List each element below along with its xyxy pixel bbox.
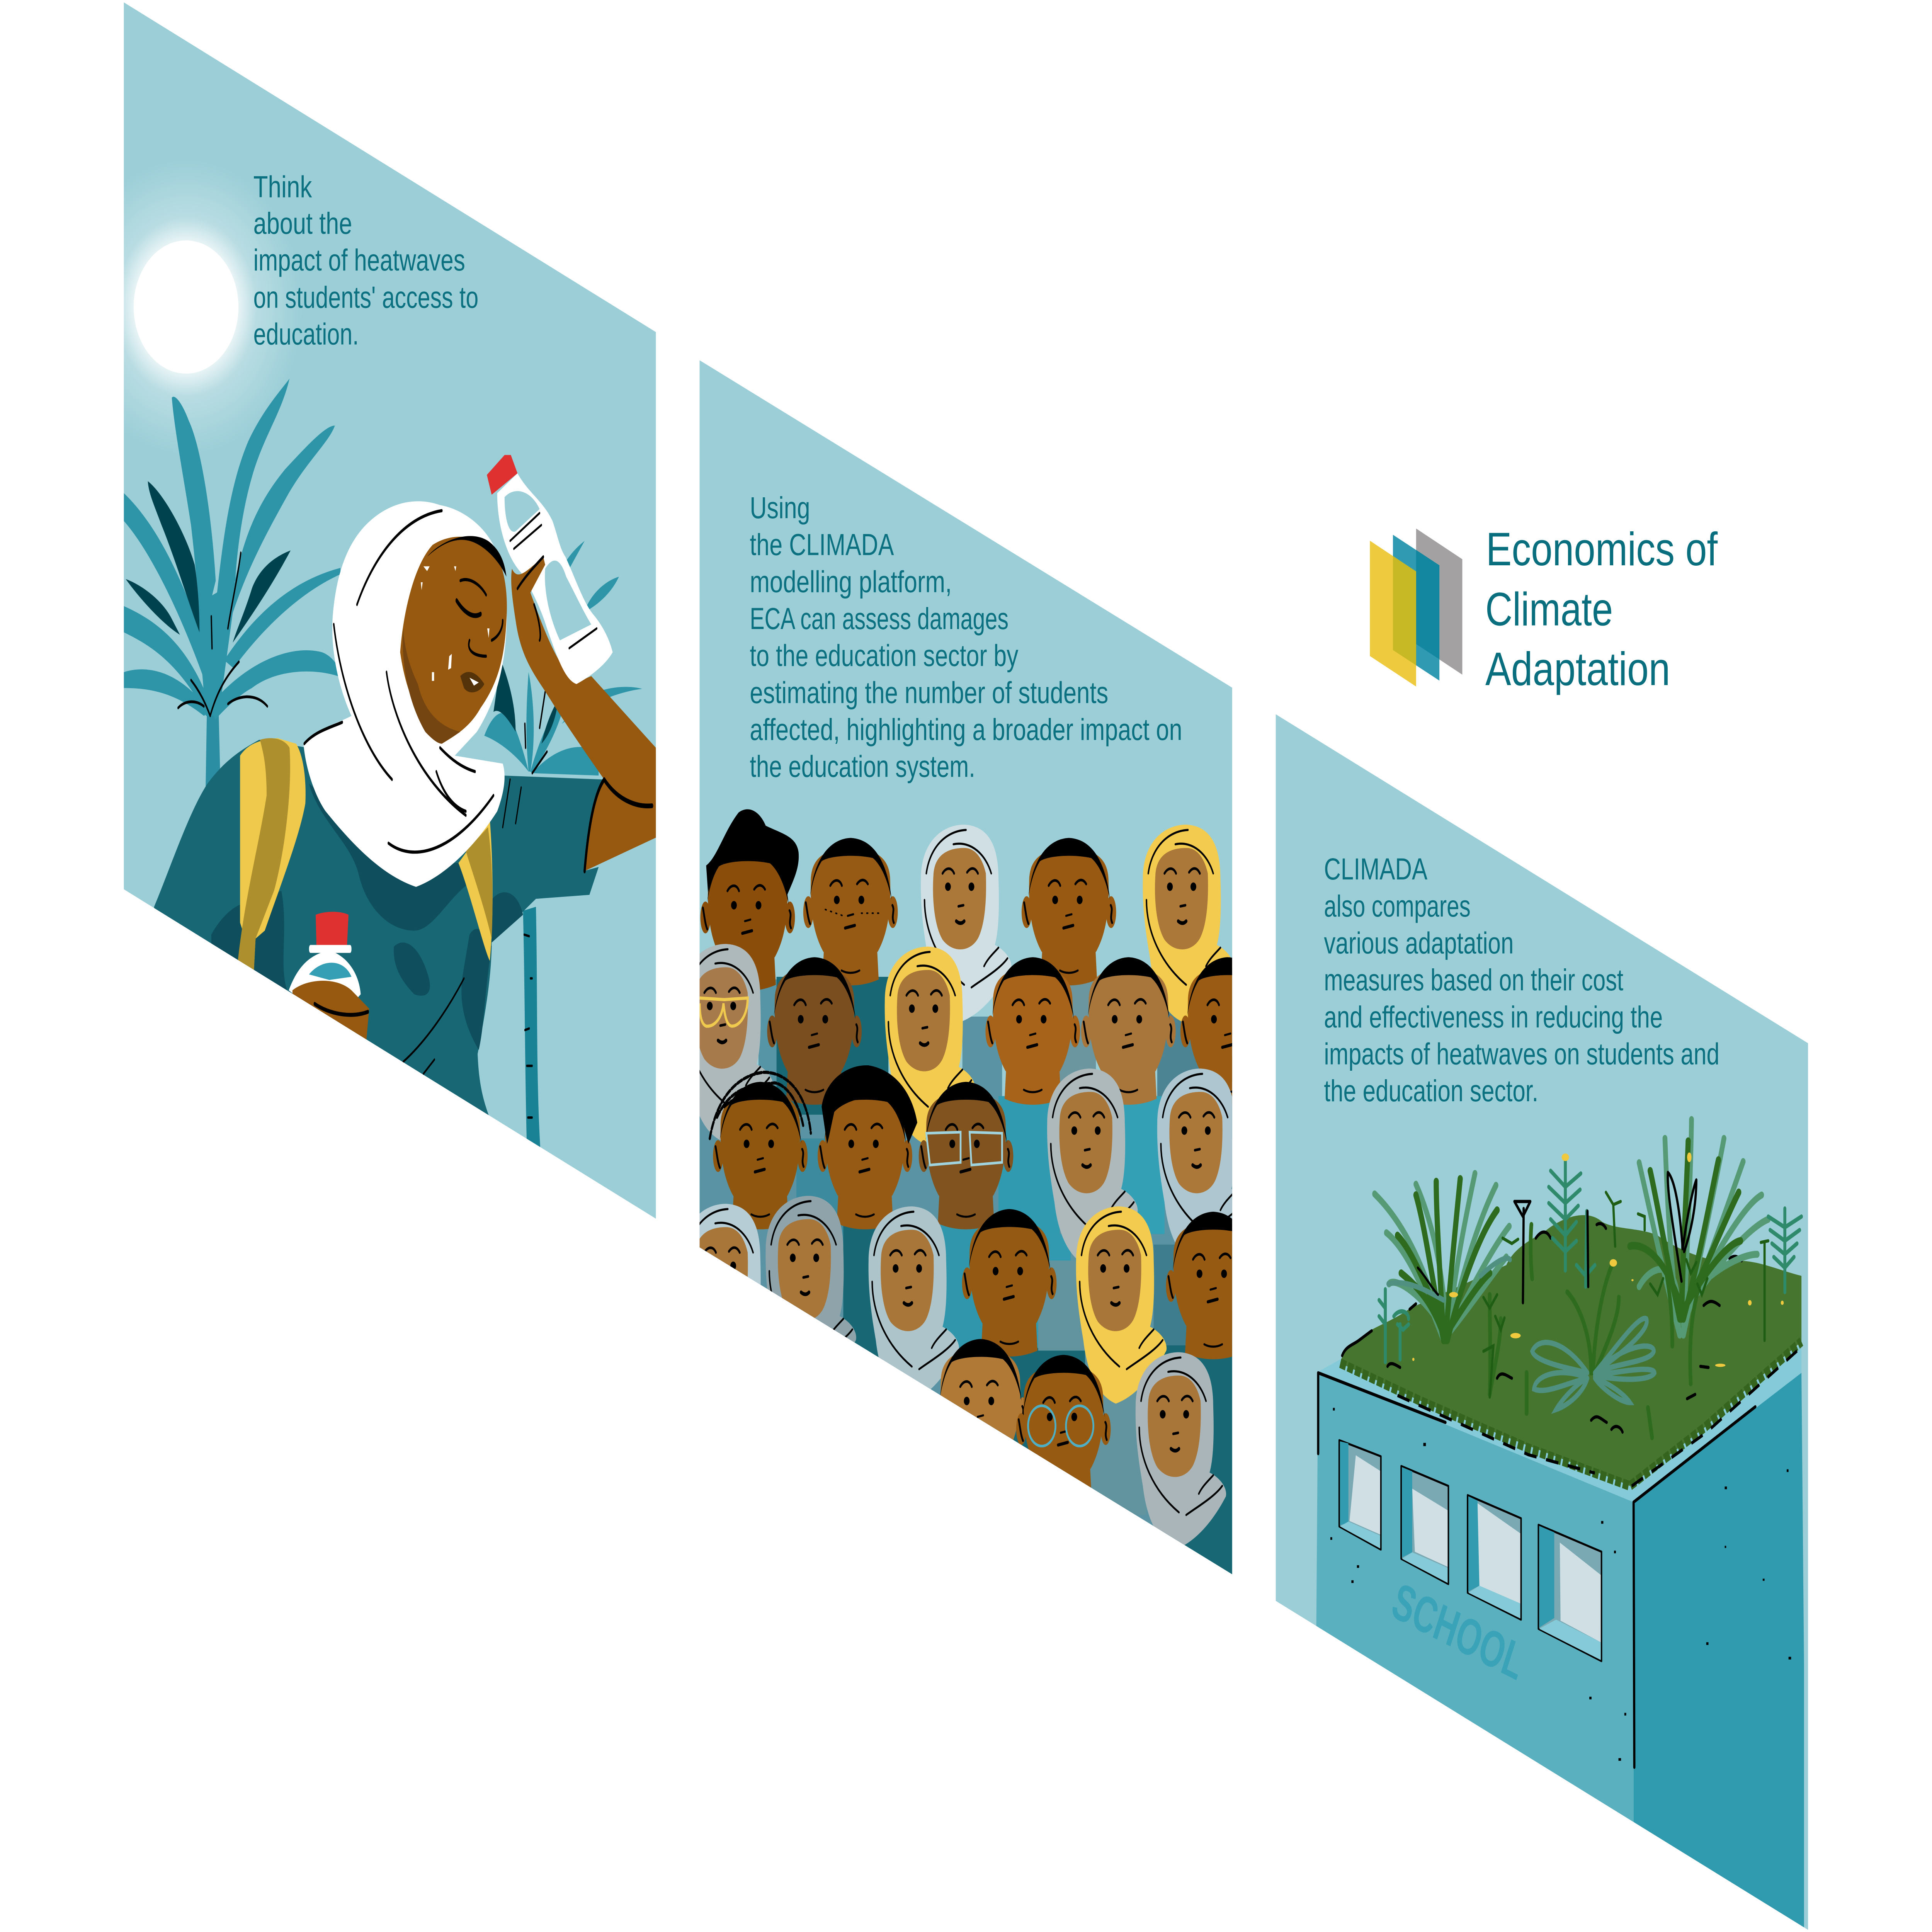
shirts background <box>699 977 1233 1578</box>
text: using the CLIMADA modelling platform: the education system. <box>750 750 975 783</box>
label: SCHOOL on wall: SCHOOL <box>1386 1571 1531 1691</box>
head: third row students <box>710 1065 1248 1266</box>
panel: CLIMADA damage assessment <box>683 360 1275 1578</box>
text: CLIMADA also compares <box>1324 852 1719 1108</box>
logo: Economics of Climate Adaptation <box>1370 523 1718 696</box>
headscarf and face <box>303 501 507 887</box>
illustration: crowd of students <box>683 809 1275 1578</box>
text: think about the impact: Think <box>253 170 312 204</box>
text: using the CLIMADA modelling platform: affected, highlighting a broader impact on <box>750 713 1182 747</box>
heading: Climate <box>1485 583 1613 636</box>
icon: left palm tree <box>124 379 342 803</box>
head: back row students <box>701 809 1233 1022</box>
heading: Adaptation <box>1485 643 1670 696</box>
text: using the CLIMADA modelling platform: estimating the number of students <box>750 675 1108 709</box>
icon: overlapping parallelograms <box>1370 529 1462 687</box>
sleeve outline <box>585 779 652 871</box>
head: front row students <box>933 1339 1226 1549</box>
student body and shirt <box>154 740 604 1115</box>
text: using the CLIMADA modelling platform: ECA can assess damages <box>750 602 1009 636</box>
text: using the CLIMADA modelling platform: the CLIMADA <box>750 528 894 561</box>
windows <box>1339 1440 1602 1661</box>
text: using the CLIMADA modelling platform <box>750 491 1182 783</box>
illustration: school with green roof <box>1316 1119 1804 1928</box>
icon: right palm tree <box>484 541 642 1150</box>
text: using the CLIMADA modelling platform: to the education sector by <box>750 639 1019 672</box>
panel: comparing adaptation measures <box>1276 714 1808 1930</box>
text: CLIMADA also compares: various adaptation <box>1324 926 1514 960</box>
text: think about the impact: impact of heatwaves <box>253 243 465 277</box>
illustration: sun, palms and student with water bottle <box>69 158 658 1150</box>
icon: water bottle at forehead <box>487 455 613 684</box>
icon: water bottle held in lower hand <box>289 912 369 1042</box>
text: using the CLIMADA modelling platform: Using <box>750 491 810 525</box>
head: second row students <box>683 944 1275 1144</box>
yellow flower dots <box>1412 1153 1784 1367</box>
backpack straps <box>238 738 493 975</box>
text: CLIMADA also compares: impacts of heatwaves on students and <box>1324 1037 1719 1071</box>
green roof mound <box>1340 1215 1801 1486</box>
heading: Economics of <box>1486 523 1718 576</box>
head: fourth row students <box>683 1196 1260 1404</box>
raised forearm and hand <box>511 557 658 871</box>
text: think about the impact: education. <box>253 317 359 351</box>
text: CLIMADA also compares: also compares <box>1324 889 1471 923</box>
heading <box>1485 523 1718 696</box>
text: using the CLIMADA modelling platform: modelling platform, <box>750 565 952 599</box>
text: think about the impact: about the <box>253 206 352 240</box>
text: think about the impact: on students' access to <box>253 280 478 314</box>
icon: sun <box>69 158 303 456</box>
school building <box>1316 1343 1804 1928</box>
text: CLIMADA also compares: and effectiveness in reducing the <box>1324 1000 1663 1034</box>
text: CLIMADA also compares: the education sector. <box>1324 1074 1538 1108</box>
text: CLIMADA also compares: measures based on their cost <box>1324 963 1623 997</box>
panel: heatwave impact on students <box>69 2 658 1219</box>
text: CLIMADA also compares: CLIMADA <box>1324 852 1428 886</box>
text: think about the impact <box>253 170 478 351</box>
plants on roof <box>1374 1119 1801 1437</box>
